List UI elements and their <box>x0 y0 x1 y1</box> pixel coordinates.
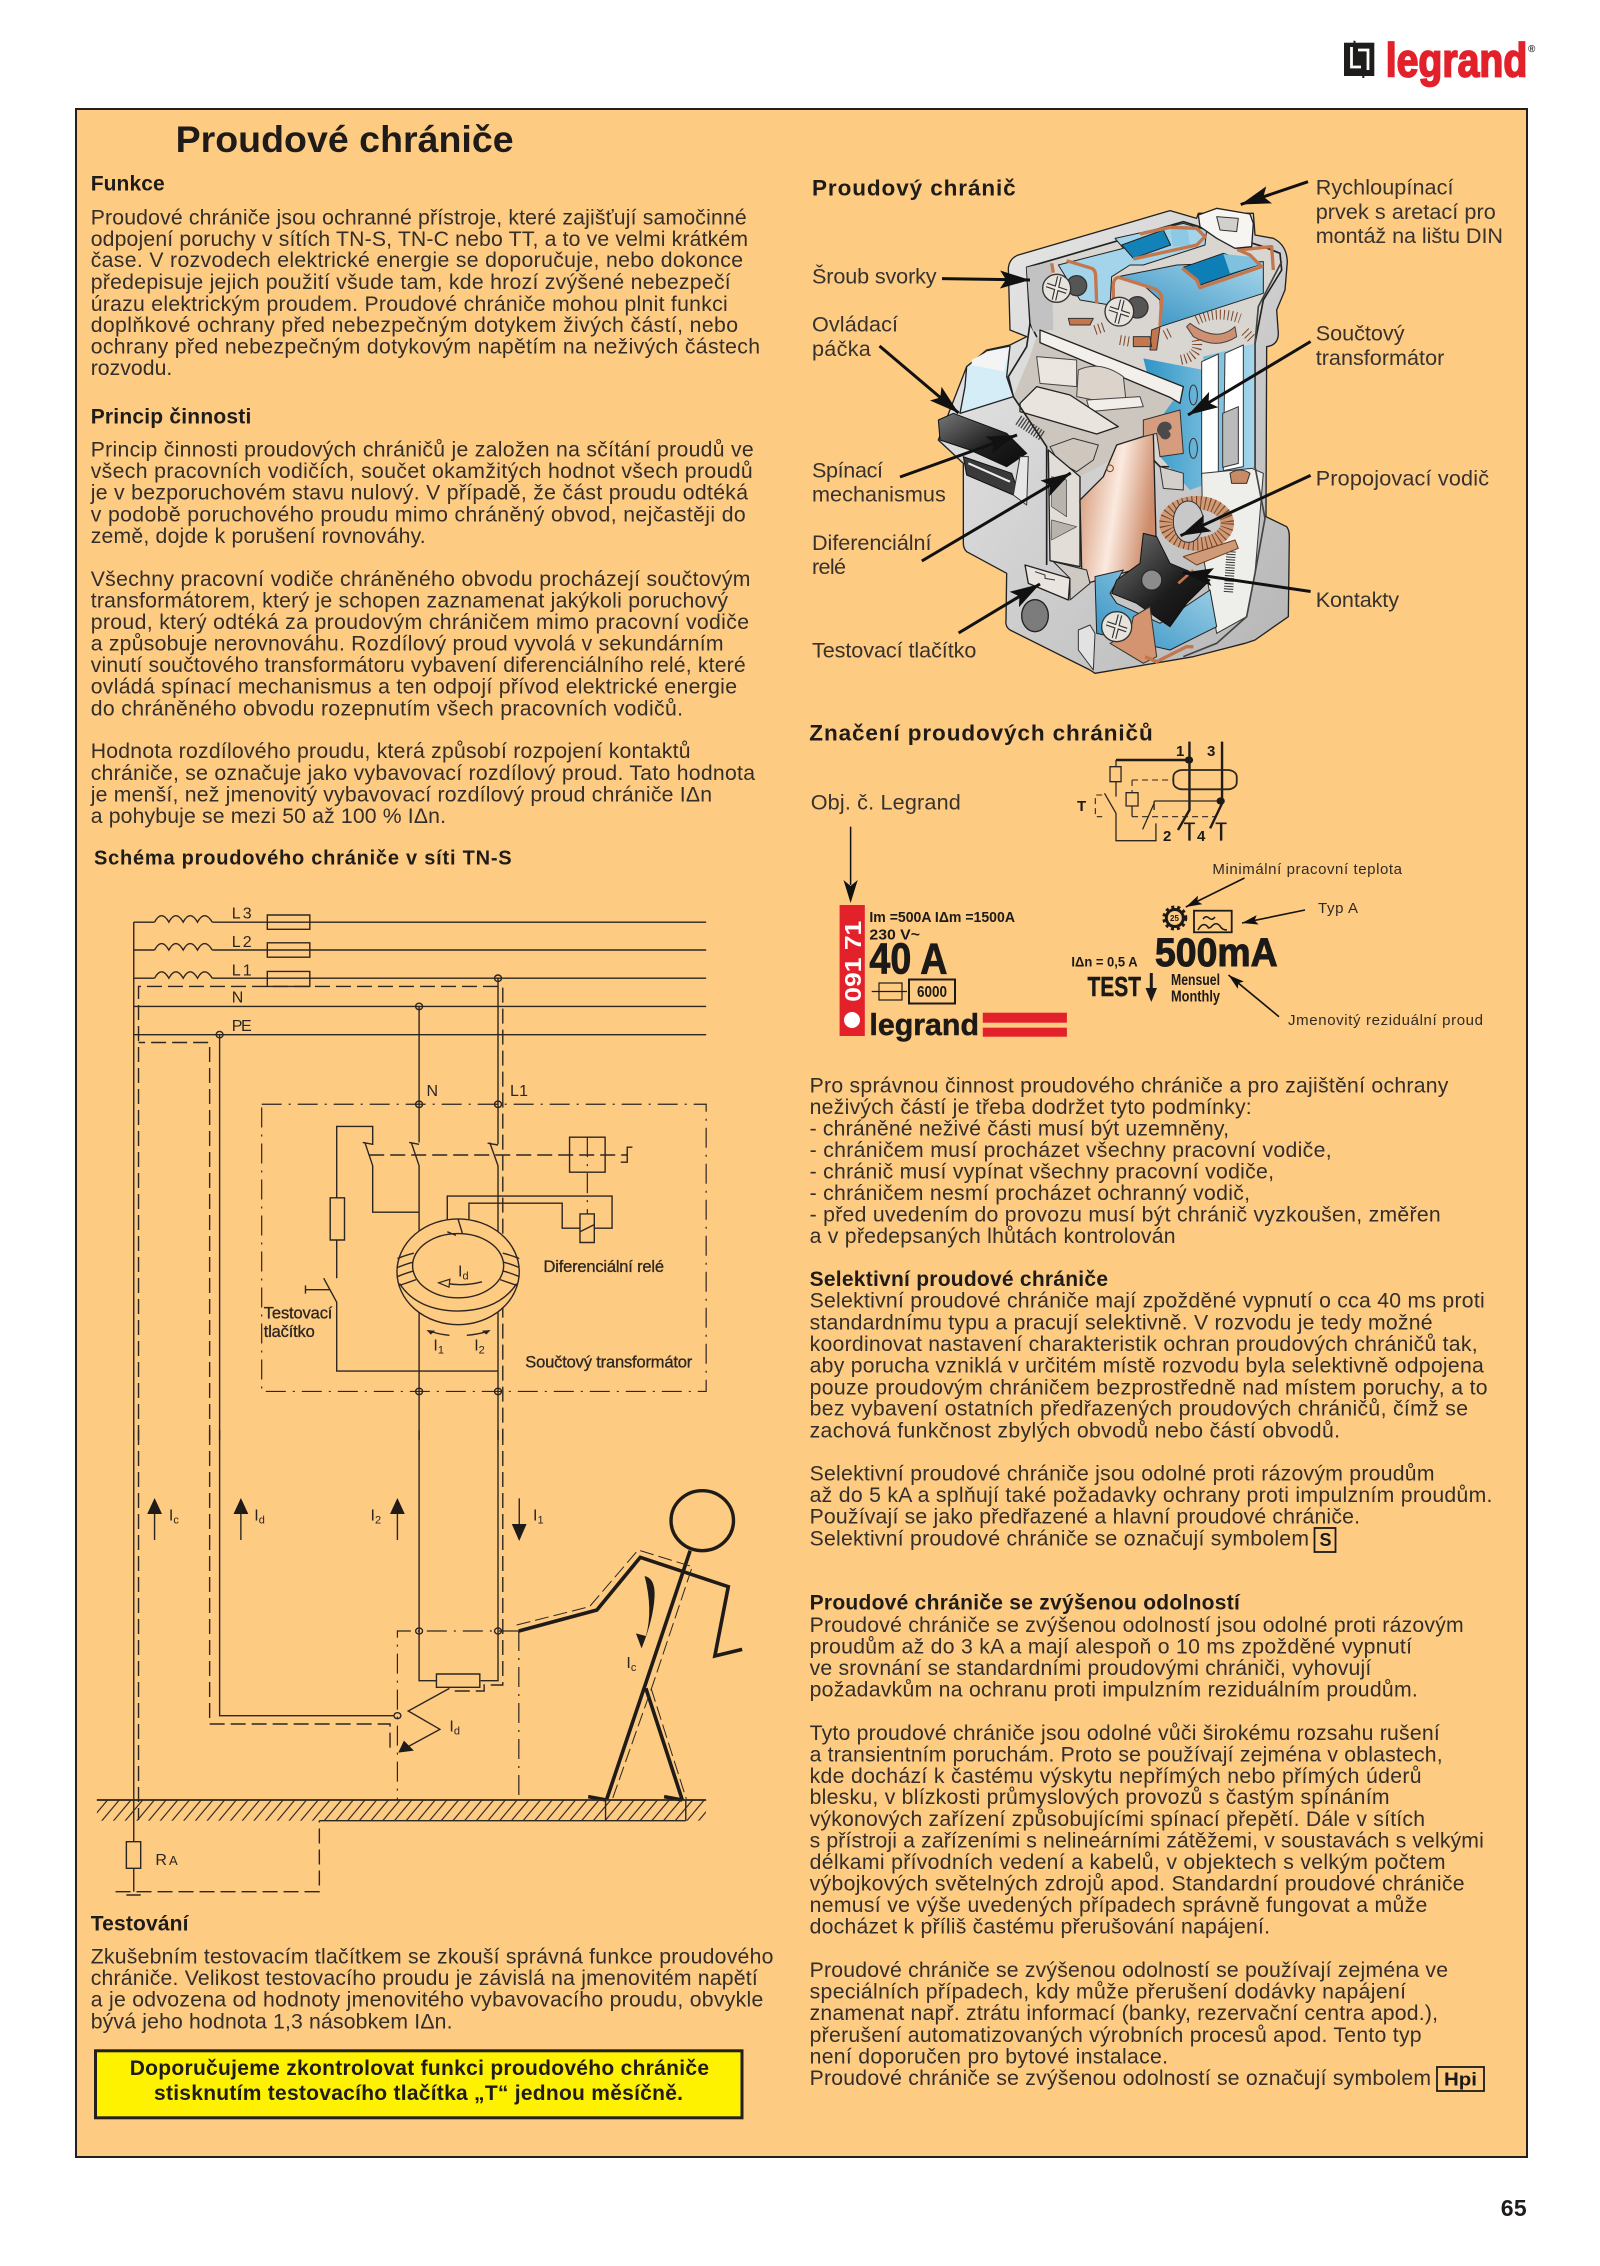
labels: device parts: Součtový <box>1316 321 1405 346</box>
text block: Proudové chrániče se zvýšenou odolností: Tyto proudové chrániče jsou odolné vůči širokému rozsahu rušení <box>810 1722 1440 1745</box>
schematic labels: N <box>426 1083 438 1100</box>
text block: conditions: - chráničem nesmí procházet ochranný vodič, <box>810 1182 1250 1205</box>
labels: device parts: Diferenciální <box>812 530 932 555</box>
schematic labels: d <box>259 1515 265 1527</box>
nameplate: right: Monthly <box>1171 989 1220 1006</box>
text block: Testování <box>91 1913 773 2033</box>
device: inner wall <box>1048 450 1080 567</box>
arrows: nameplate pointers <box>1186 878 1305 1017</box>
circuit symbol: marking diagram <box>1077 742 1237 845</box>
icon: gear temperature <box>1164 907 1186 929</box>
text block: conditions: - chráněné neživé části musí být uzemněny, <box>810 1118 1229 1141</box>
text block: Proudové chrániče se zvýšenou odolností: Proudové chrániče se zvýšenou odolností se označují symbolem <box>810 2067 1431 2090</box>
labels: device parts: Spínací <box>812 458 883 483</box>
text block: Proudové chrániče se zvýšenou odolností: není doporučen pro bytové instalace. <box>810 2046 1168 2068</box>
device: blue column and rails <box>1143 343 1255 490</box>
ground hatch <box>97 1800 706 1821</box>
text block: Princip činnosti: Princip činnosti <box>91 405 251 428</box>
schematic labels: I <box>449 1719 454 1736</box>
schematic labels: RA <box>155 1852 178 1869</box>
circuit symbol: marking diagram: 2 <box>1163 828 1171 845</box>
logo: legrand: legrand <box>1386 34 1527 87</box>
schematic labels: L2 <box>232 934 252 951</box>
text block: Selektivní proudové chrániče: standardnímu typu a pracují selektivně. V rozvodu je tedy možné <box>810 1311 1433 1334</box>
label: Obj. č. Legrand: Obj. č. Legrand <box>811 789 961 814</box>
text block: Proudové chrániče se zvýšenou odolností: výbojkových světelných zdrojů apod. Standardní proudové chrániče <box>810 1872 1465 1895</box>
schematic labels: Testovací <box>264 1305 333 1323</box>
text block: Princip činnosti: Všechny pracovní vodiče chráněného obvodu procházejí součtovým <box>91 568 750 591</box>
symbol: S <box>1314 1528 1336 1552</box>
device: test button <box>1025 565 1070 600</box>
text block: Proudové chrániče se zvýšenou odolností: přerušení automatizovaných výrobních procesů apod. Tento typ <box>810 2024 1422 2047</box>
schematic labels: I <box>626 1655 631 1672</box>
device: front terminal <box>1118 262 1263 327</box>
device: interior cavity <box>1027 222 1282 467</box>
callout: monthly test recommendation <box>96 2051 742 2118</box>
nameplate: left <box>840 905 1067 1042</box>
labels: device parts: Testovací tlačítko <box>812 638 976 663</box>
symbol: S: S <box>1320 1530 1332 1550</box>
text block: Selektivní proudové chrániče: Selektivní proudové chrániče se označují symbolem <box>810 1527 1309 1550</box>
schematic labels: c <box>173 1515 179 1527</box>
text block: Selektivní proudové chrániče: Selektivní proudové chrániče mají zpožděné vypnutí o cca 40 ms proti <box>810 1290 1485 1313</box>
text block: Selektivní proudové chrániče: Používají se jako předřazené a hlavní proudové chrániče. <box>810 1506 1360 1529</box>
device: interconnect coil <box>1166 503 1227 544</box>
labels: nameplate annotations: Jmenovitý reziduální proud <box>1288 1012 1483 1029</box>
arrow: order number <box>844 827 858 903</box>
text block: Testování: Testování <box>91 1913 190 1936</box>
text block: Princip činnosti: země, dojde k porušení rovnováhy. <box>91 525 426 548</box>
text block: Selektivní proudové chrániče: bez vybavení ostatních předřazených proudových chráničů, čímž se <box>810 1398 1468 1421</box>
text block: Princip činnosti: do chráněného obvodu rozepnutím všech pracovních vodičů. <box>91 697 683 720</box>
schematic labels: tlačítko <box>264 1323 315 1341</box>
schematic labels: Diferenciální relé <box>544 1258 664 1276</box>
text block: conditions: - před uvedením do provozu musí být chránič vyzkoušen, změřen <box>810 1204 1441 1227</box>
labels: device parts: Šroub svorky <box>812 264 937 288</box>
text block: Selektivní proudové chrániče: zachová funkčnost zbylých obvodů nebo částí obvodů. <box>810 1419 1340 1442</box>
device: lower screw and strap <box>1110 607 1157 663</box>
text block: Funkce: rozvodu. <box>91 357 172 380</box>
device: rear terminal <box>1058 223 1207 305</box>
text block: Proudové chrániče se zvýšenou odolností: nemusí ve výše uvedených případech správně fungovat a může <box>810 1894 1427 1917</box>
text block: Princip činnosti: Hodnota rozdílového proudu, která způsobí rozpojení kontaktů <box>91 740 690 763</box>
labels: device parts: Propojovací vodič <box>1316 466 1489 491</box>
schematic labels: 2 <box>375 1515 381 1527</box>
labels: device parts: páčka <box>812 336 872 361</box>
schematic labels: I <box>370 1508 375 1525</box>
schematic labels: L1 <box>510 1083 528 1100</box>
text block: Selektivní proudové chrániče: pouze proudovým chráničem bezprostředně nad místem poruchy, a to <box>810 1376 1488 1399</box>
title: Proudové chrániče <box>176 118 514 160</box>
text block: Funkce: odpojení poruchy v sítích TN-S, TN-C nebo TT, a to ve velmi krátkém <box>91 228 748 251</box>
arrows: device part pointers <box>880 182 1311 633</box>
symbol: Hpi: Hpi <box>1444 2070 1477 2090</box>
labels: device parts: Kontakty <box>1316 587 1399 612</box>
device: lower blue terminal <box>1095 570 1217 650</box>
text block: Princip činnosti: chrániče, se označuje jako vybavovací rozdílový proud. Tato hodnota <box>91 762 755 785</box>
labels: device parts <box>812 175 1503 663</box>
schematic labels: I <box>433 1338 438 1355</box>
heading: Značení: Značení proudových chráničů <box>809 721 1153 746</box>
text block: Testování: Zkušebním testovacím tlačítkem se zkouší správná funkce proudového <box>91 1945 773 1968</box>
text block: Testování: chrániče. Velikost testovacího proudu je závislá na jmenovitém napětí <box>91 1967 758 1990</box>
schematic labels: 1 <box>438 1345 444 1357</box>
labels: device parts: Ovládací <box>812 312 898 337</box>
nameplate: right: Mensuel <box>1171 972 1220 989</box>
text block: Funkce: Funkce <box>91 172 165 196</box>
schematic: lower part <box>97 1430 742 1895</box>
callout: monthly test recommendation: stisknutím testovacího tlačítka „T“ jednou měsíčně. <box>154 2082 683 2105</box>
labels: nameplate annotations: Typ A <box>1318 900 1358 917</box>
circuit symbol: marking diagram: 4 <box>1197 828 1206 845</box>
text block: conditions <box>810 1074 1449 1248</box>
nameplate: left: Im =500A IΔm =1500A <box>869 909 1015 926</box>
heading: schema: Schéma proudového chrániče v síti TN-S <box>94 848 512 870</box>
text block: conditions: neživých částí je třeba dodržet tyto podmínky: <box>810 1096 1252 1119</box>
nameplate: right: IΔn = 0,5 A <box>1071 954 1138 970</box>
page number: 65 <box>1501 2195 1527 2221</box>
callout: monthly test recommendation: Doporučujeme zkontrolovat funkci proudového chrániče <box>130 2057 709 2080</box>
schematic labels: c <box>631 1662 637 1674</box>
device: copper braids <box>1068 315 1252 360</box>
text block: Funkce: doplňkové ochrany před nebezpečným dotykem živých částí, nebo <box>91 314 738 337</box>
labels: device parts: montáž na lištu DIN <box>1316 223 1503 248</box>
text block: Princip činnosti: je menší, než jmenovitý vybavovací rozdílový proud chrániče IΔn <box>90 784 712 806</box>
schematic labels: I <box>474 1338 479 1355</box>
icon: gear temperature: 25 <box>1170 914 1179 923</box>
device: lower white interior <box>1202 468 1263 633</box>
text block: Testování: a je odvozena od hodnoty jmenovitého vybavovacího proudu, obvykle <box>91 1989 763 2012</box>
text block: Proudové chrániče se zvýšenou odolností: Proudové chrániče se zvýšenou odolností se používají zejména ve <box>810 1959 1448 1982</box>
labels: device parts: prvek s aretací pro <box>1316 199 1496 224</box>
text block: Proudové chrániče se zvýšenou odolností: docházet k příliš častému přerušování napájení. <box>810 1916 1270 1939</box>
nameplate: right <box>1071 907 1278 1006</box>
device: contact carrier <box>1112 533 1210 627</box>
text block: conditions: - chráničem musí procházet všechny pracovní vodiče, <box>810 1139 1332 1162</box>
device: mounting hole <box>1022 600 1048 632</box>
schematic labels: PE <box>232 1018 252 1035</box>
logo: legrand: ® <box>1528 44 1536 55</box>
nameplate: left: 6000 <box>917 984 947 1001</box>
device: screws <box>1043 274 1148 326</box>
labels: device parts: mechanismus <box>812 481 946 506</box>
device: copper plates <box>1080 433 1157 583</box>
text block: Selektivní proudové chrániče: aby porucha vzniklá v určitém místě rozvodu byla selektivně odpojena <box>810 1354 1484 1377</box>
schematic labels <box>155 906 693 1869</box>
schematic labels: I <box>458 1263 462 1280</box>
text block: Proudové chrániče se zvýšenou odolností: s přístroji a zařízeními s nelineárními zátěžemi, v soustavách s velkými <box>810 1830 1484 1853</box>
nameplate: left: legrand <box>869 1007 979 1042</box>
illustration: residual current device cutaway <box>938 208 1289 673</box>
schematic labels: d <box>454 1726 460 1738</box>
labels: device parts: relé <box>812 554 846 579</box>
text block: Proudové chrániče se zvýšenou odolností: Proudové chrániče se zvýšenou odolností jsou odolné proti rázovým <box>810 1614 1464 1637</box>
labels: nameplate annotations <box>1212 861 1483 1029</box>
chart: TN-S circuit schematic <box>97 906 742 1895</box>
text block: Funkce: ochrany před nebezpečným dotykovým napětím na neživých částech <box>91 336 760 359</box>
schematic labels: 2 <box>479 1345 485 1357</box>
text block: Funkce: předepisuje jejich použití všude tam, kde hrozí zvýšené nebezpečí <box>91 271 731 294</box>
text block: Princip činnosti: transformátorem, který je schopen zaznamenat jakýkoli poruchový <box>91 590 728 612</box>
text block: Proudové chrániče se zvýšenou odolností: a transientním poruchám. Proto se používají zejména v oblastech, <box>810 1744 1443 1766</box>
text block: Selektivní proudové chrániče: Selektivní proudové chrániče jsou odolné proti rázovým proudům <box>810 1463 1434 1486</box>
text block: Funkce: čase. V rozvodech elektrické energie se doporučuje, nebo dokonce <box>91 249 743 272</box>
current arrows <box>147 1498 527 1541</box>
symbol: Hpi <box>1437 2067 1484 2091</box>
text block: Princip činnosti: Princip činnosti proudových chráničů je založen na sčítání proudů ve <box>91 439 754 462</box>
text block: Proudové chrániče se zvýšenou odolností: výkonových zařízení způsobujícími spínací přepětí. Dále v sítích <box>810 1808 1425 1831</box>
device: operating handle <box>960 346 1013 413</box>
labels: device parts: transformátor <box>1316 345 1444 370</box>
text block: Proudové chrániče se zvýšenou odolností: blesku, v blízkosti průmyslových provozů s častým spínáním <box>810 1786 1390 1809</box>
text block: Princip činnosti: a způsobuje nerovnováhu. Rozdílový proud vyvolá v sekundárním <box>91 633 723 656</box>
schematic labels: Součtový transformátor <box>525 1354 693 1372</box>
text block: Selektivní proudové chrániče: Selektivní proudové chrániče <box>810 1268 1108 1291</box>
nameplate: left: 091 71 <box>840 920 866 1002</box>
icon: stick figure <box>517 1491 742 1800</box>
circuit symbol: marking diagram: 3 <box>1207 743 1215 760</box>
text block: Princip činnosti: a pohybuje se mezi 50 až 100 % IΔn. <box>91 805 446 828</box>
text block: Proudové chrániče se zvýšenou odolností: proudům až do 3 kA a mají alespoň o 10 ms zpožděné vypnutí <box>810 1636 1412 1659</box>
text block: Princip činnosti: ovládá spínací mechanismus a ten odpojí přívod elektrické energie <box>91 676 737 698</box>
text block: Proudové chrániče se zvýšenou odolností: požadavkům na ochranu proti impulzním reziduálním proudům. <box>810 1679 1418 1702</box>
text block: Princip činnosti: vinutí součtového transformátoru vybavení diferenciálního relé, které <box>91 654 746 677</box>
text block: Proudové chrániče se zvýšenou odolností: znamenat např. ztrátu informací (banky, rezervační centra apod.), <box>810 2002 1438 2025</box>
text block: Princip činnosti: je v bezporuchovém stavu nulový. V případě, že část proudu odtéká <box>90 482 748 504</box>
text block: Princip činnosti: všech pracovních vodičích, součet okamžitých hodnot všech proudů <box>91 460 753 483</box>
text block: Proudové chrániče se zvýšenou odolností: speciálních případech, kdy může přerušení dodávky napájení <box>810 1981 1406 2004</box>
text block: Princip činnosti: proud, který odtéká za proudovým chráničem mimo pracovní vodiče <box>91 611 749 634</box>
text block: Proudové chrániče se zvýšenou odolností: ve srovnání se standardními proudovými chrániči, vyhovují <box>810 1657 1371 1680</box>
text block: conditions: - chránič musí vypínat všechny pracovní vodiče, <box>810 1160 1274 1183</box>
device: outer wire <box>1183 262 1282 657</box>
text block: Selektivní proudové chrániče: koordinovat nastavení charakteristik ochran proudových chráničů tak, <box>810 1333 1478 1356</box>
nameplate: left: 230 V~ <box>869 926 920 943</box>
heading: Proudový chránič: Proudový chránič <box>812 176 1016 200</box>
schematic labels: L3 <box>232 906 252 923</box>
device: housing <box>938 211 1289 673</box>
text block: Princip činnosti: v podobě poruchového proudu mimo chráněný obvod, nejčastěji do <box>91 503 746 526</box>
text block: Funkce: úrazu elektrickým proudem. Proudové chrániče mohou plnit funkci <box>91 293 728 316</box>
schematic labels: I <box>169 1508 173 1525</box>
nameplate: left: 40 A <box>869 934 948 983</box>
circuit symbol: marking diagram: 1 <box>1176 743 1184 760</box>
text block: Testování: bývá jeho hodnota 1,3 násobkem IΔn. <box>91 2010 452 2033</box>
labels: device parts: Rychloupínací <box>1316 175 1454 200</box>
text block: Proudové chrániče se zvýšenou odolností: kde dochází k častému výskytu nepřímých nebo přímých úderů <box>810 1765 1422 1788</box>
text block: Funkce <box>91 172 760 380</box>
text block: conditions: a v předepsaných lhůtách kontrolován <box>810 1225 1176 1248</box>
circuit symbol: marking diagram: T <box>1077 798 1086 815</box>
text block: Princip činnosti <box>90 405 755 828</box>
text block: Proudové chrániče se zvýšenou odolností: Proudové chrániče se zvýšenou odolností <box>810 1592 1241 1615</box>
schematic labels: I <box>533 1508 537 1525</box>
schematic: upper part <box>134 915 706 1440</box>
text block: Selektivní proudové chrániče: až do 5 kA a splňují také požadavky ochrany proti impulzním proudům. <box>810 1484 1492 1507</box>
text block: Proudové chrániče se zvýšenou odolností: délkami přívodních vedení a kabelů, v objektech s velkým počtem <box>810 1851 1446 1874</box>
labels: nameplate annotations: Minimální pracovní teplota <box>1212 861 1403 878</box>
schematic labels: d <box>462 1270 469 1282</box>
text block: Funkce: Proudové chrániče jsou ochranné přístroje, které zajišťují samočinné <box>91 206 747 229</box>
device: release clip <box>1198 208 1253 248</box>
text block: conditions: Pro správnou činnost proudového chrániče a pro zajištění ochrany <box>810 1074 1449 1097</box>
nameplate: right: TEST <box>1088 971 1141 1002</box>
text block: Proudové chrániče se zvýšenou odolností <box>810 1592 1484 2090</box>
device: switching mechanism <box>1013 337 1183 477</box>
schematic labels: 1 <box>537 1515 544 1527</box>
schematic labels: I <box>254 1508 259 1525</box>
schematic labels: N <box>232 990 243 1006</box>
icon: type A wave <box>1194 911 1232 932</box>
text block: Selektivní proudové chrániče <box>810 1268 1492 1550</box>
schematic labels: L1 <box>232 962 252 979</box>
nameplate: right: 500mA <box>1155 931 1278 975</box>
